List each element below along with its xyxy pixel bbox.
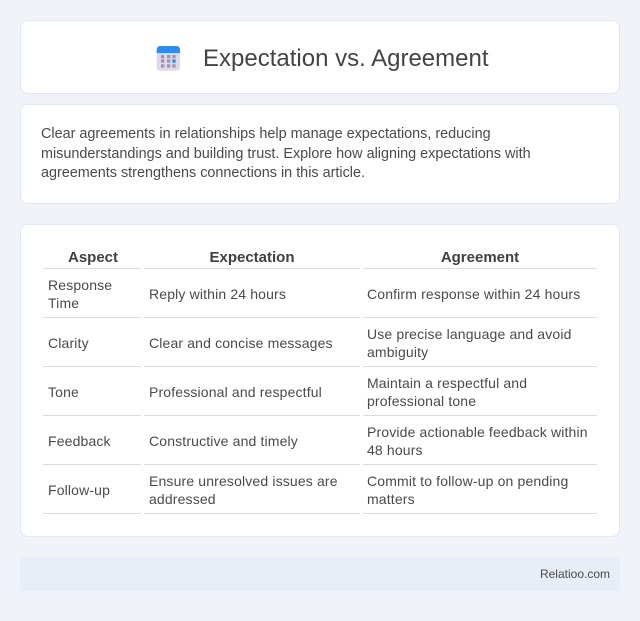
panel: comparison table (20, 224, 620, 537)
footer brand text: Relatioo.com (540, 567, 610, 581)
table header: Aspect (68, 249, 118, 266)
table rows: Response (48, 277, 112, 293)
table rows: Follow-up (48, 482, 110, 498)
table rows: Time (48, 295, 79, 311)
panel: title card (20, 20, 620, 94)
icon: calendar (156, 46, 180, 71)
intro text: Clear agreements in relationships help manage expectations, reducing (41, 126, 491, 142)
table rows: Feedback (48, 433, 111, 449)
table rows: Clear and concise messages (149, 335, 333, 351)
table rows (43, 268, 597, 514)
table header: Agreement (441, 249, 519, 266)
panel: introduction (20, 104, 620, 204)
table header (68, 249, 519, 266)
table rows: Commit to follow-up on pending (367, 473, 568, 489)
table rows: Ensure unresolved issues are (149, 473, 338, 489)
table rows: Reply within 24 hours (149, 286, 286, 302)
table rows: Use precise language and avoid (367, 326, 572, 342)
table rows: Professional and respectful (149, 384, 322, 400)
table rows: Provide actionable feedback within (367, 424, 588, 440)
title: Expectation vs. Agreement (203, 45, 488, 72)
table rows: matters (367, 491, 415, 507)
intro text: misunderstandings and building trust. Explore how aligning expectations with (41, 146, 531, 162)
intro text: agreements strengthens connections in this article. (41, 165, 365, 181)
table rows: Maintain a respectful and (367, 375, 527, 391)
table rows: 48 hours (367, 442, 423, 458)
table rows: Confirm response within 24 hours (367, 286, 580, 302)
intro text (41, 126, 531, 181)
table header: Expectation (209, 249, 295, 266)
table rows: ambiguity (367, 344, 428, 360)
table rows: Constructive and timely (149, 433, 298, 449)
table rows: Tone (48, 384, 79, 400)
table rows: addressed (149, 491, 216, 507)
table rows: Clarity (48, 335, 89, 351)
footer (20, 557, 620, 591)
table rows: professional tone (367, 393, 476, 409)
